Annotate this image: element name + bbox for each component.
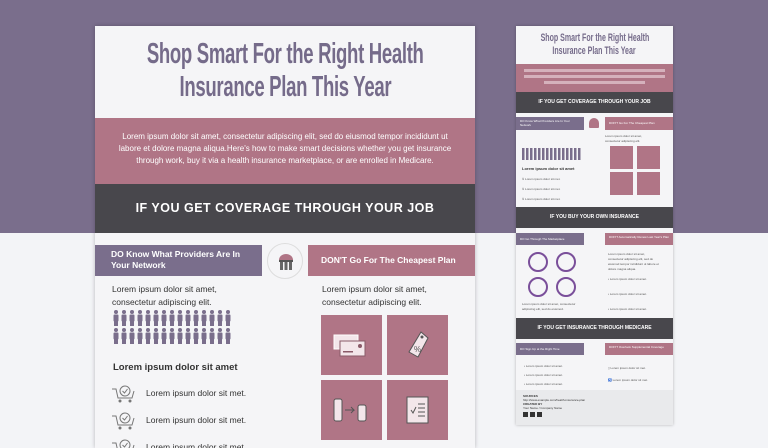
mini footer: sources: Your Name / Company Name (523, 406, 562, 410)
mini headers row 1 (516, 117, 673, 130)
mini heading: medicare: IF YOU GET INSURANCE THROUGH MEDICARE (537, 325, 652, 331)
panel: large infographic (95, 26, 475, 448)
panel: small infographic: • Lorem ipsum dolor sit amet. (608, 292, 647, 296)
mini headers row 3 (516, 343, 673, 355)
panel: small infographic: eiusmod tempor incididunt ut labore et (608, 262, 659, 266)
panel: small infographic: ▯ Lorem ipsum dolor sit met. (608, 366, 646, 370)
text block left (112, 284, 217, 307)
mini headers row 2: DO Go Through The Marketplace (520, 237, 564, 241)
title: Shop Smart For the Right Health (147, 38, 423, 70)
header: DO know providers (95, 245, 262, 276)
panel: small infographic: • Lorem ipsum dolor sit amet. (608, 307, 647, 311)
section heading: job (95, 184, 475, 233)
panel: small infographic: consectetur adipiscing elit, sed do (608, 257, 653, 261)
panel: small infographic: Lorem ipsum dolor sit amet, (608, 252, 645, 256)
mini intro band (516, 64, 673, 92)
mini footer: sources: SOURCES (523, 394, 538, 398)
mini title (540, 32, 649, 57)
panel: small infographic: • Lorem ipsum dolor sit amet. (524, 373, 563, 377)
header: DO know providers: Your Network (111, 260, 166, 270)
panel: small infographic: dolore magna aliqua. (608, 267, 636, 271)
intro band: Lorem ipsum dolor sit amet, consectetur adipiscing elit, sed do eiusmod tempor incididunt ut labore et dolore magna aliqua.Here's how to make smart decisions whether you get insurance through work, buy it via a health insurance marketplace, or are enrolled in Medicare. (119, 132, 451, 165)
mini circles (528, 252, 576, 297)
mini heading: medicare (516, 318, 673, 339)
text block right: Lorem ipsum dolor sit amet, (322, 284, 427, 294)
mini content job: ⊻ Lorem ipsum dolor sit met. (522, 187, 560, 191)
mini heading: own insurance: IF YOU BUY YOUR OWN INSURANCE (550, 214, 639, 220)
cart list (112, 386, 246, 448)
icon: cards (321, 315, 382, 375)
people icons (114, 310, 230, 344)
panel: small infographic: adipiscing elit, sed do eiusmod. (522, 307, 564, 311)
mini title: Insurance Plan This Year (553, 45, 636, 57)
panel: small infographic: • Lorem ipsum dolor sit amet. (524, 382, 563, 386)
mini headers row 1: DO Know What Providers Are In Your Network (520, 119, 570, 127)
mini footer: sources (516, 390, 673, 425)
mini content job: Lorem ipsum dolor sit amet, (605, 134, 642, 138)
mini content job: ⊻ Lorem ipsum dolor sit met. (522, 177, 560, 181)
header: DON'T cheapest (308, 245, 475, 276)
mini footer: sources: http://www.example.com/health-insurance-plan (523, 398, 585, 402)
background top band (0, 0, 768, 233)
panel: small infographic (516, 26, 673, 425)
mini content job: ⊻ Lorem ipsum dolor sit met. (522, 197, 560, 201)
mini headers row 3: DO Sign Up at the Right Time (520, 347, 560, 351)
mini title: Shop Smart For the Right Health (540, 32, 649, 44)
icon grid (321, 315, 448, 440)
mini headers row 1: DON'T Go For The Cheapest Plan (609, 121, 655, 125)
text block right: consectetur adipiscing elit. (322, 297, 422, 307)
section heading: job: IF YOU GET COVERAGE THROUGH YOUR JOB (136, 201, 434, 215)
mini footer: sources: CREATED BY (523, 402, 542, 406)
icon: checklist (387, 380, 448, 440)
panel: small infographic: • Lorem ipsum dolor sit amet. (524, 364, 563, 368)
mini content job: consectetur adipiscing elit. (605, 139, 640, 143)
header: DON'T cheapest: DON'T Go For The Cheapest Plan (321, 255, 456, 265)
text block left: consectetur adipiscing elit. (112, 297, 212, 307)
mini content job: Lorem ipsum dolor sit amet (522, 166, 574, 171)
mini headers row 2 (516, 233, 673, 245)
icon: coins transfer (321, 380, 382, 440)
panel: small infographic: Lorem ipsum dolor sit amet, consectetur (522, 302, 575, 306)
title (147, 38, 423, 103)
mini headers row 3: DON'T Overlook Supplemental Coverage (609, 345, 664, 349)
mini heading: job: IF YOU GET COVERAGE THROUGH YOUR JOB (538, 99, 651, 105)
text block right (322, 284, 427, 307)
panel: small infographic: ♿ Lorem ipsum dolor sit met. (608, 378, 648, 382)
intro band (95, 118, 475, 184)
cart list: Lorem ipsum dolor sit met. (146, 415, 246, 425)
mini heading: own insurance (516, 207, 673, 228)
icon: tag (387, 315, 448, 375)
cart list: Lorem ipsum dolor sit met. (146, 388, 246, 398)
mini content job (522, 134, 660, 201)
mini headers row 2: DON'T Automatically Renew Last Year's Plan (609, 235, 669, 239)
title: Insurance Plan This Year (179, 71, 391, 103)
subheading: Lorem ipsum dolor sit amet (113, 362, 238, 373)
header: DO know providers: DO Know What Providers Are In (111, 249, 240, 259)
icon: tag: % (414, 345, 421, 354)
mini heading: job (516, 92, 673, 113)
icon: bank (267, 243, 303, 279)
panel: small infographic: • Lorem ipsum dolor sit amet. (608, 277, 647, 281)
text block left: Lorem ipsum dolor sit amet, (112, 284, 217, 294)
